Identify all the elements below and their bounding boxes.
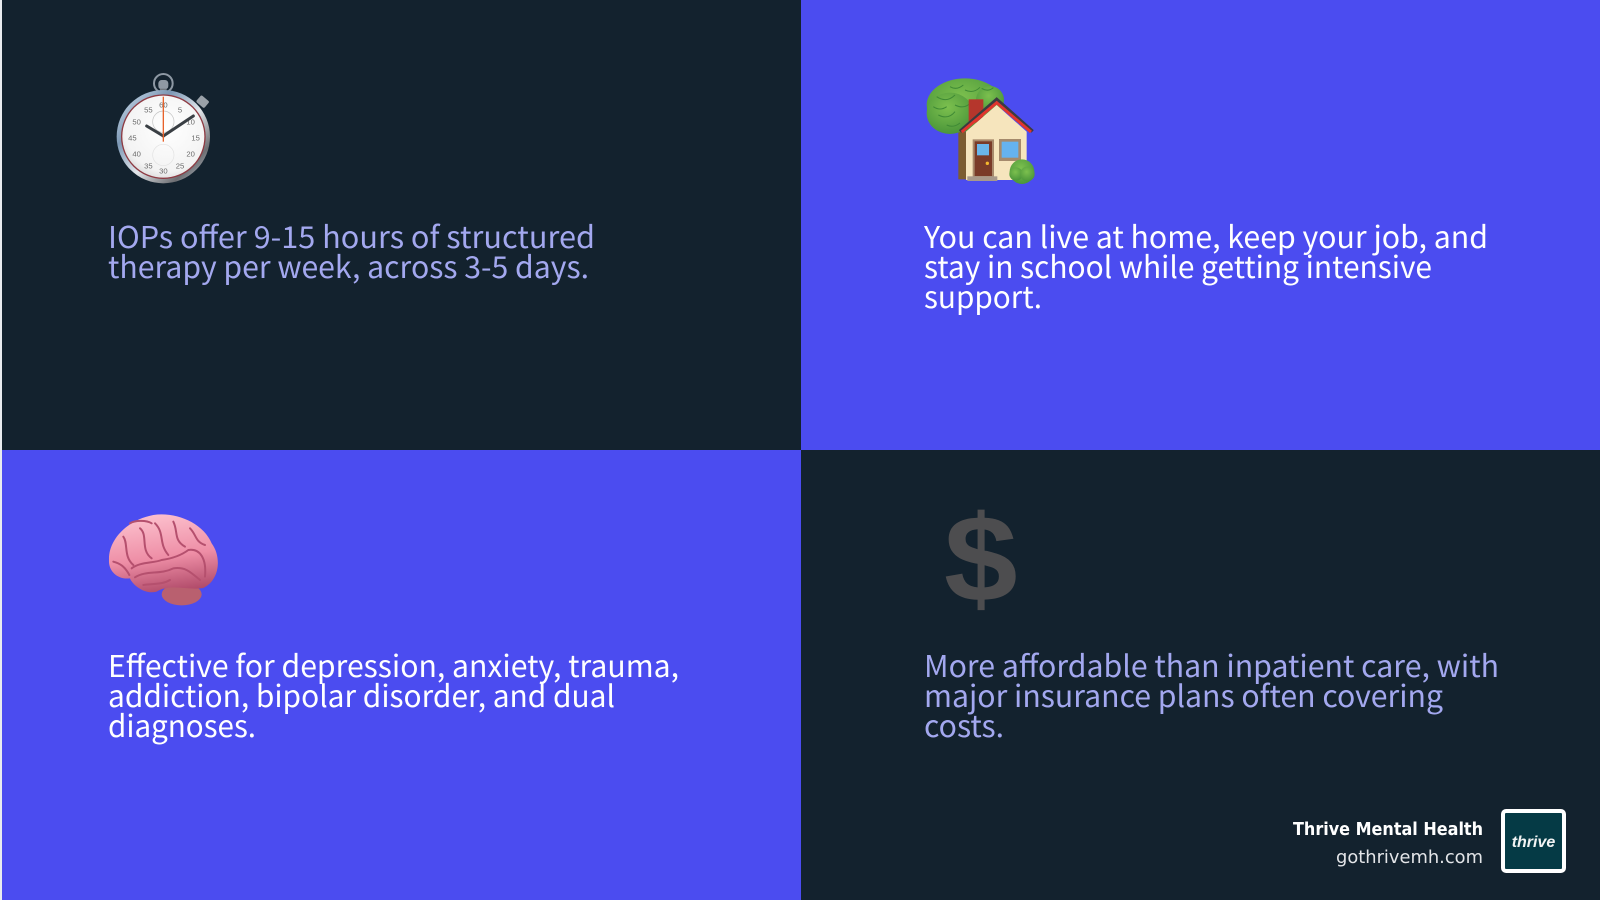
- icon: stopwatch: 25: [176, 161, 184, 170]
- text: conditions treated: [108, 642, 679, 746]
- panel: weekly hours: [2, 0, 801, 450]
- text: conditions treated: Effective for depression, anxiety, trauma,: [108, 642, 679, 686]
- text: live at home: [923, 213, 1488, 317]
- icon: stopwatch: 5: [178, 106, 182, 115]
- text: live at home: support.: [924, 273, 1042, 317]
- icon: brain: [109, 514, 218, 605]
- text: live at home: You can live at home, keep your job, and: [923, 213, 1488, 257]
- text: affordability: major insurance plans often covering: [924, 672, 1443, 716]
- icon: house with tree: [927, 78, 1035, 184]
- text: affordability: costs.: [924, 702, 1004, 746]
- icon: stopwatch: 15: [191, 133, 200, 142]
- icon: stopwatch: 35: [144, 161, 153, 170]
- panel: affordability: [801, 450, 1600, 900]
- logo: [1503, 811, 1564, 871]
- brand url: gothrivemh.com: [1336, 847, 1483, 868]
- icon: stopwatch: [117, 74, 210, 183]
- icon: stopwatch: 10: [186, 117, 195, 126]
- text: affordability: More affordable than inpatient care, with: [924, 642, 1499, 686]
- icon: stopwatch: 45: [128, 133, 137, 142]
- text: live at home: stay in school while getting intensive: [924, 243, 1432, 287]
- text: conditions treated: addiction, bipolar disorder, and dual: [108, 672, 615, 716]
- brand name: Thrive Mental Health: [1293, 819, 1483, 840]
- text: conditions treated: diagnoses.: [108, 702, 256, 746]
- icon: stopwatch: 20: [186, 150, 195, 159]
- icon: stopwatch: 50: [132, 117, 141, 126]
- icon: stopwatch: 40: [132, 150, 141, 159]
- icon: stopwatch: 55: [144, 106, 153, 115]
- text: weekly hours: [108, 213, 595, 287]
- icon: stopwatch: 60: [159, 101, 168, 110]
- icon: dollar sign: $: [944, 490, 1018, 628]
- text: affordability: [924, 642, 1499, 746]
- icon: stopwatch: 30: [159, 166, 168, 175]
- footer brand: [1293, 811, 1564, 871]
- logo: thrive: [1512, 834, 1555, 851]
- text: weekly hours: therapy per week, across 3-5 days.: [108, 243, 589, 287]
- panel: conditions treated: [2, 450, 801, 900]
- panel: live at home: [801, 0, 1600, 450]
- text: weekly hours: IOPs offer 9-15 hours of structured: [108, 213, 595, 257]
